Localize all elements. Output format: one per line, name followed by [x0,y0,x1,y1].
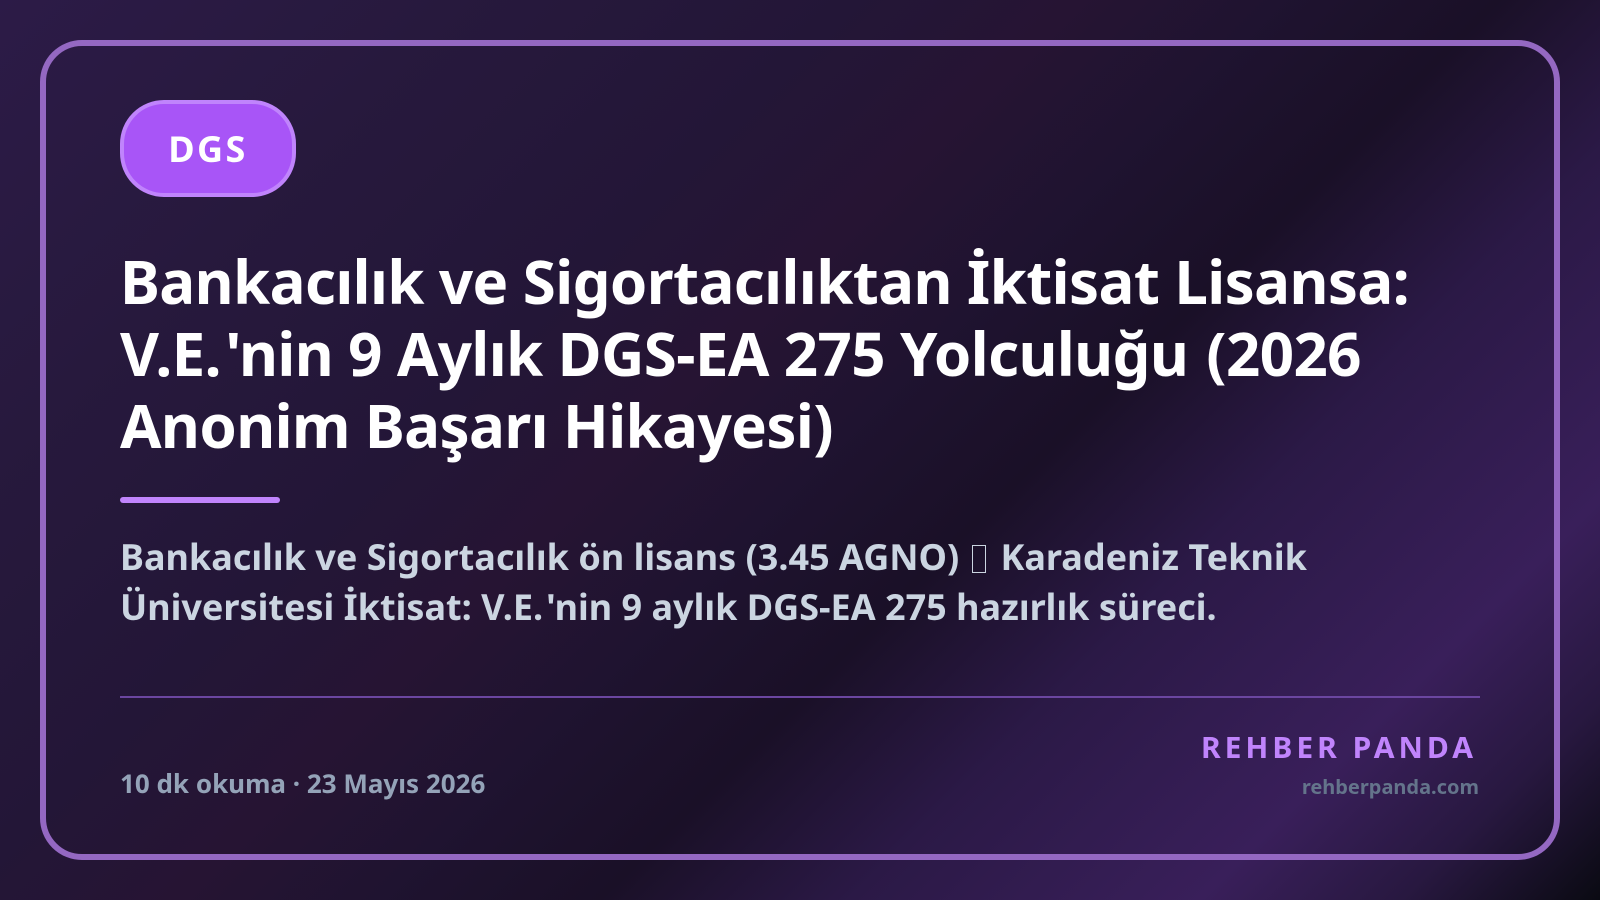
subtitle: Üniversitesi İktisat: V.E.'nin 9 aylık DGS-EA 275 hazırlık süreci. [120,582,1217,631]
title: Anonim Başarı Hikayesi) [120,384,833,466]
footer divider [120,696,1480,698]
title [120,240,1409,466]
category badge: DGS [168,124,248,173]
title: Bankacılık ve Sigortacılıktan İktisat Lisansa: [120,240,1409,322]
accent rule [120,497,280,503]
subtitle [120,532,1307,631]
website url: rehberpanda.com [1302,773,1479,800]
brand name: REHBER PANDA [1201,726,1477,767]
title: V.E.'nin 9 Aylık DGS-EA 275 Yolculuğu (2026 [120,312,1361,394]
subtitle: Bankacılık ve Sigortacılık ön lisans (3.45 AGNO) Karadeniz Teknik [120,532,1307,581]
reading time and date: 10 dk okuma · 23 Mayıs 2026 [120,765,485,801]
category badge [120,100,296,197]
